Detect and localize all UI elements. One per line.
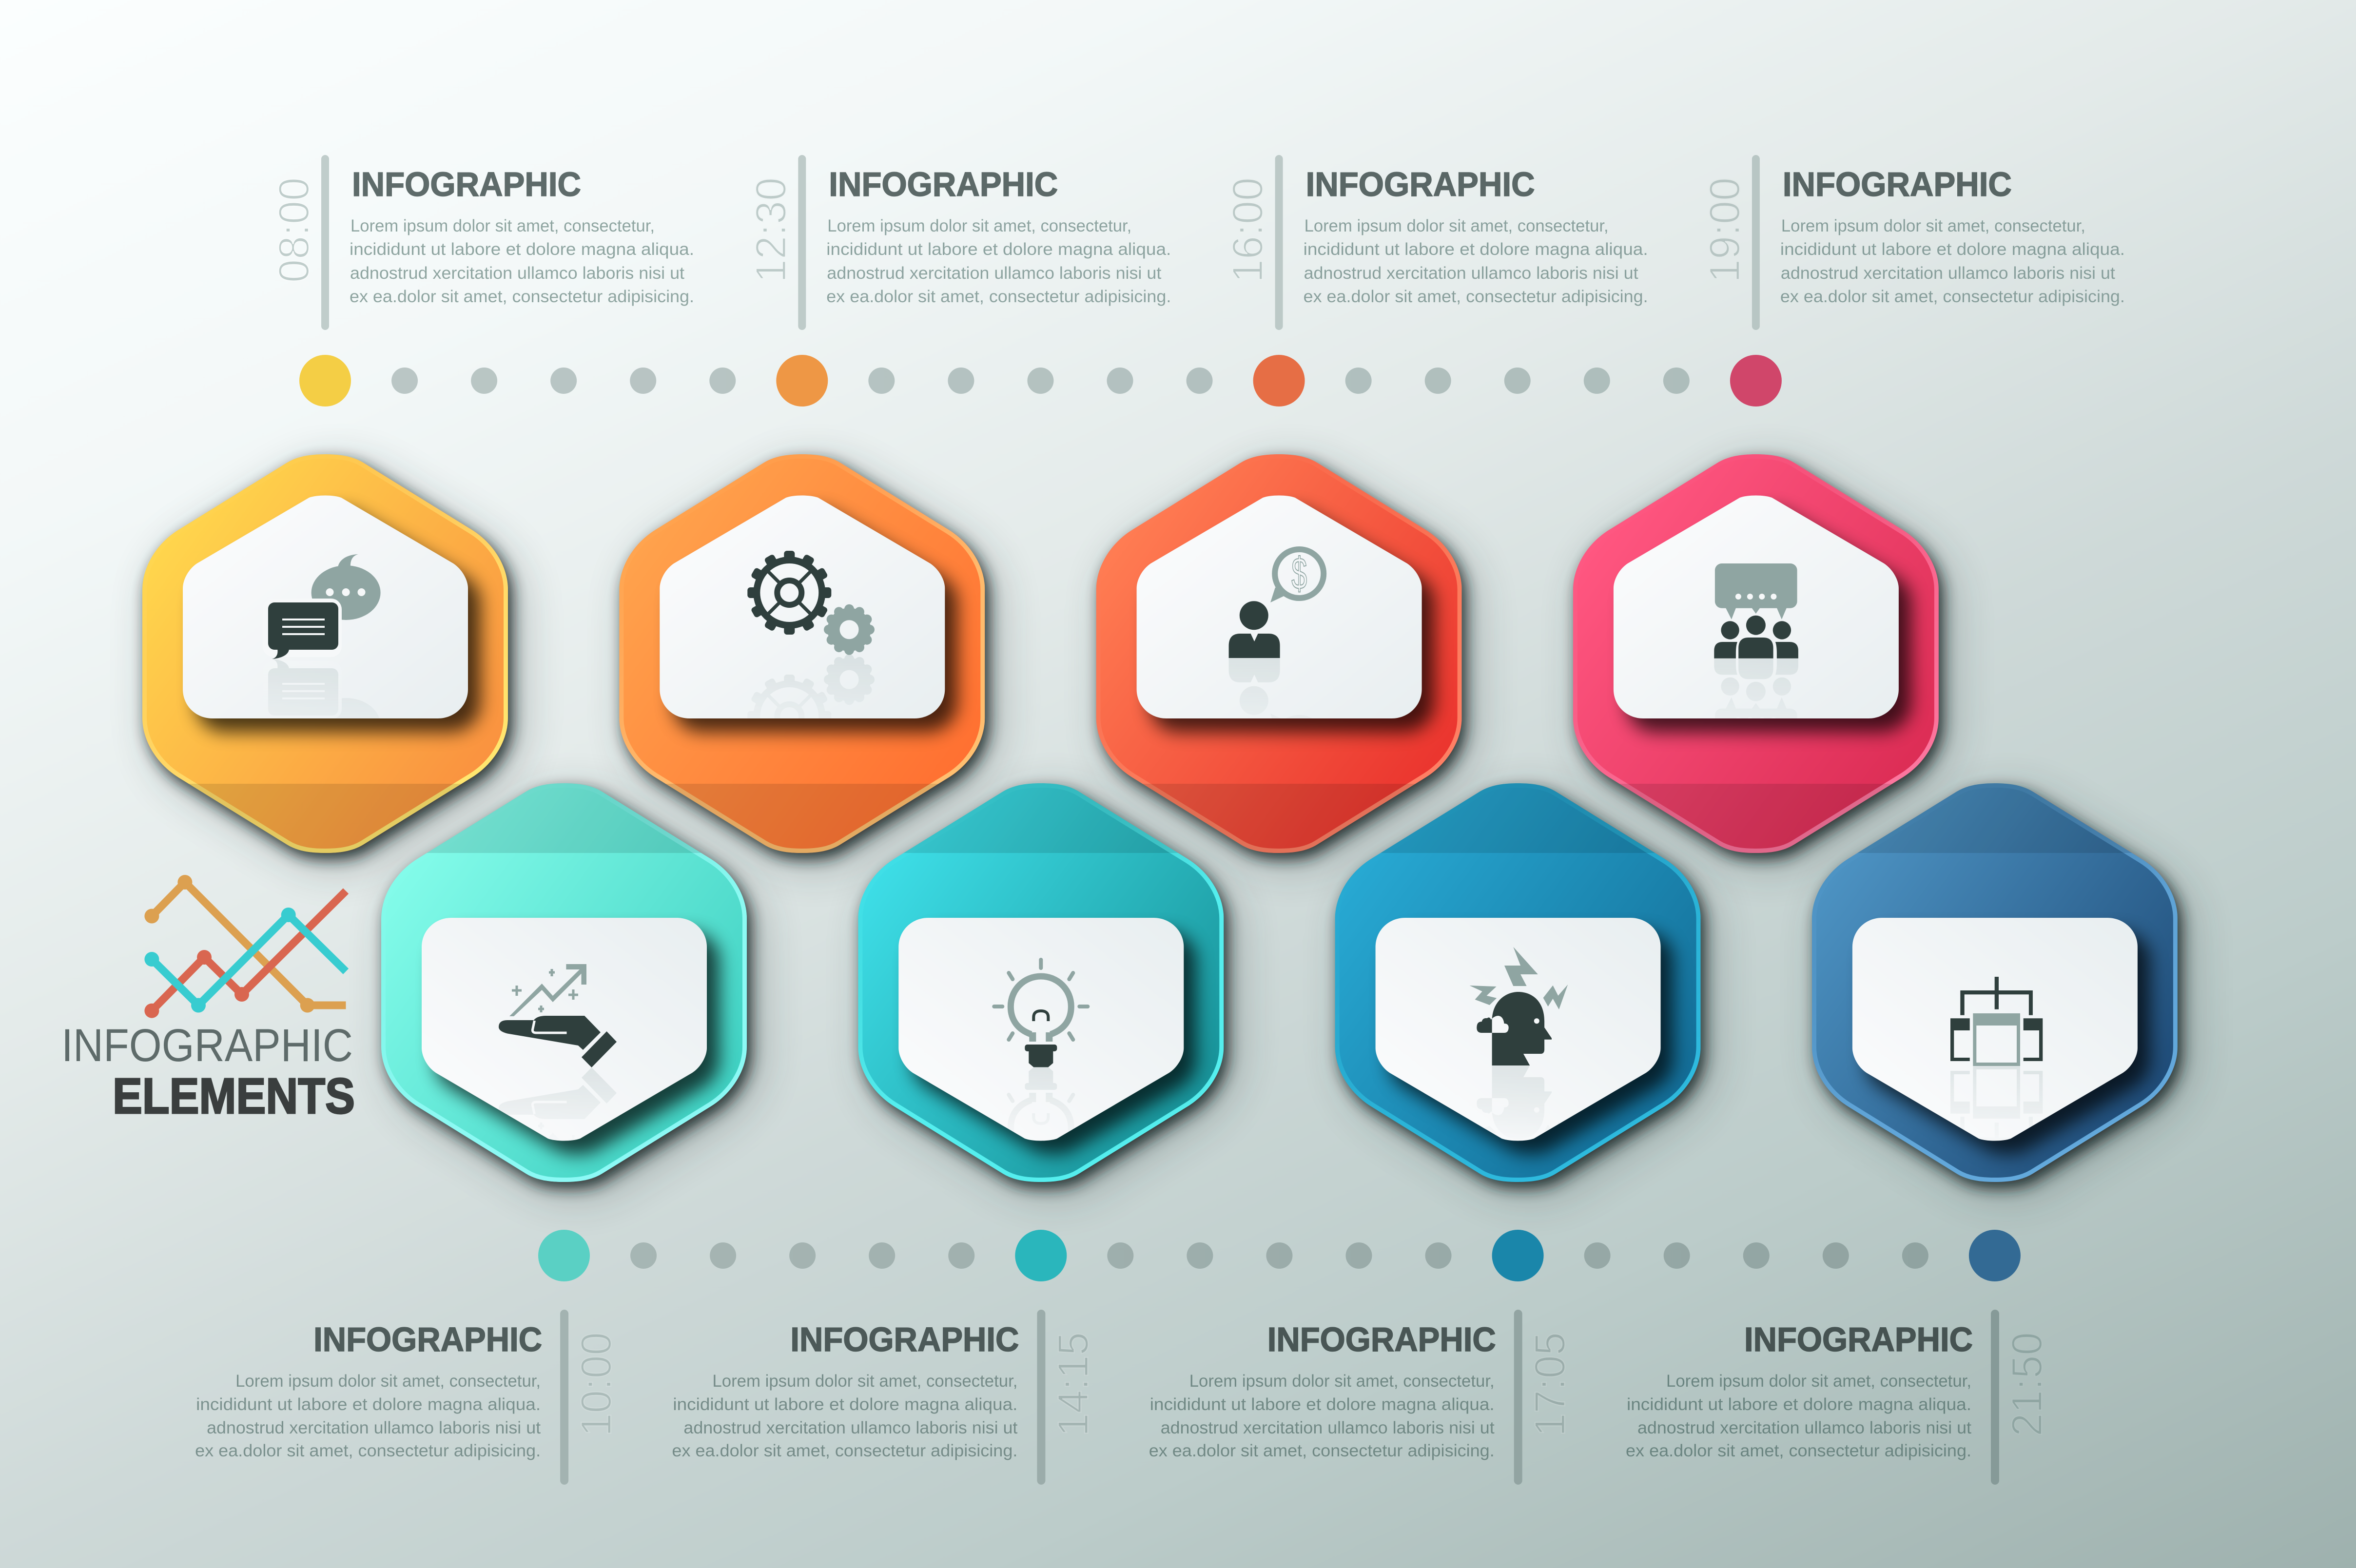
icon: flow diagram [1950, 977, 2043, 1066]
divider bar [1037, 1310, 1045, 1485]
divider bar [1752, 155, 1760, 330]
hexagon shadow [147, 461, 520, 865]
hexagon 8: navy [1800, 775, 2190, 1194]
body text: Lorem ipsum dolor sit amet, consectetur, [827, 216, 1131, 235]
hexagon 6: teal [846, 775, 1236, 1194]
top text block 3 [1224, 155, 1648, 330]
top text block 4 [1700, 155, 2125, 330]
icon: head with lightning [1470, 947, 1568, 1065]
body text: ex ea.dolor sit amet, consectetur adipisicing. [1149, 1441, 1495, 1460]
white panel [183, 495, 468, 718]
body text: Lorem ipsum dolor sit amet, consectetur, [1666, 1372, 1971, 1391]
hexagon body [130, 454, 520, 862]
hexagon 1: yellow [130, 454, 520, 865]
body text: incididunt ut labore et dolore magna aliqua. [673, 1395, 1017, 1414]
icon reflection [1950, 1066, 2043, 1155]
body text: ex ea.dolor sit amet, consectetur adipisicing. [672, 1441, 1017, 1460]
hexagon shadow [386, 790, 759, 1194]
logo word: INFOGRAPHIC: INFOGRAPHIC [61, 1020, 353, 1071]
body text [1780, 216, 2125, 306]
bottom text block 2 [672, 1310, 1097, 1485]
white panel [1137, 495, 1422, 718]
hexagon shadow [1101, 461, 1474, 865]
body text: adnostrud xercitation ullamco laboris nisi ut [1161, 1418, 1495, 1437]
body text: incididunt ut labore et dolore magna aliqua. [1304, 240, 1648, 259]
white panel [898, 918, 1184, 1141]
body text: ex ea.dolor sit amet, consectetur adipisicing. [1304, 287, 1648, 306]
hexagon 5: mint [369, 775, 759, 1194]
time label: 17:05 [1526, 1332, 1574, 1436]
time label: 12:30 [746, 177, 795, 283]
time label: 16:00 [1224, 177, 1272, 283]
time label: 21:50 [2003, 1332, 2051, 1436]
logo word: ELEMENTS: ELEMENTS [113, 1068, 355, 1124]
body text: adnostrud xercitation ullamco laboris nisi ut [1781, 264, 2115, 283]
body text: Lorem ipsum dolor sit amet, consectetur, [1305, 216, 1609, 235]
heading: INFOGRAPHIC [1267, 1320, 1496, 1358]
body text: ex ea.dolor sit amet, consectetur adipisicing. [350, 287, 694, 306]
body text: Lorem ipsum dolor sit amet, consectetur, [350, 216, 655, 235]
icon: chat bubbles [263, 554, 381, 659]
hexagon shadow [1577, 461, 1950, 865]
body text: incididunt ut labore et dolore magna aliqua. [1627, 1395, 1971, 1414]
time label: 08:00 [270, 177, 318, 283]
body text: incididunt ut labore et dolore magna aliqua. [1150, 1395, 1495, 1414]
icon reflection [994, 1067, 1088, 1175]
body text [350, 216, 694, 306]
hexagon body [1323, 775, 1713, 1182]
body text [1626, 1372, 1971, 1460]
hexagon shadow [623, 461, 996, 865]
heading: INFOGRAPHIC [790, 1320, 1019, 1358]
body text [826, 216, 1171, 306]
icon: person with dollar bubble [1229, 549, 1324, 658]
divider bar [1991, 1310, 1999, 1485]
bottom text block 1 [195, 1310, 620, 1485]
heading: INFOGRAPHIC [1744, 1320, 1973, 1358]
body text: ex ea.dolor sit amet, consectetur adipisicing. [195, 1441, 541, 1460]
body text: ex ea.dolor sit amet, consectetur adipisicing. [1626, 1441, 1971, 1460]
time label: 14:15 [1049, 1332, 1097, 1436]
white panel [1614, 495, 1899, 718]
hexagon 2: orange [607, 454, 997, 865]
divider bar [1514, 1310, 1522, 1485]
time label: 19:00 [1700, 177, 1749, 283]
icon reflection [499, 1067, 617, 1171]
body text: Lorem ipsum dolor sit amet, consectetur, [1781, 216, 2085, 235]
body text: Lorem ipsum dolor sit amet, consectetur, [712, 1372, 1017, 1391]
top text block 1 [270, 155, 694, 330]
body text: ex ea.dolor sit amet, consectetur adipisicing. [1780, 287, 2125, 306]
body text: Lorem ipsum dolor sit amet, consectetur, [235, 1372, 541, 1391]
hexagon 7: blue [1323, 775, 1713, 1194]
icon: light bulb [994, 960, 1088, 1067]
heading: INFOGRAPHIC [352, 165, 581, 203]
logo: infographic elements [61, 875, 355, 1124]
hexagon shadow [862, 790, 1235, 1194]
body text [1304, 216, 1648, 306]
time label: 10:00 [572, 1332, 620, 1436]
top text block 2 [746, 155, 1171, 330]
body text [672, 1372, 1018, 1460]
bottom timeline dots [538, 1230, 2021, 1281]
divider bar [1275, 155, 1283, 330]
icon: group with speech bubble [1714, 563, 1798, 658]
hexagon body [1800, 775, 2190, 1182]
logo line chart [144, 875, 346, 1018]
icon reflection [747, 654, 875, 758]
heading: INFOGRAPHIC [1306, 165, 1535, 203]
white panel [660, 495, 945, 718]
hexagon shadow [1340, 790, 1713, 1194]
divider bar [321, 155, 329, 330]
hexagon body [1561, 454, 1951, 862]
white panel [1376, 918, 1661, 1141]
body text: adnostrud xercitation ullamco laboris nisi ut [1304, 264, 1638, 283]
icon: hand with rising chart [499, 964, 617, 1067]
hexagon 3: red [1084, 454, 1474, 865]
icon: gears [747, 551, 875, 655]
icon reflection [1714, 658, 1798, 753]
body text: incididunt ut labore et dolore magna aliqua. [1780, 240, 2125, 259]
body text: incididunt ut labore et dolore magna aliqua. [196, 1395, 541, 1414]
body text: adnostrud xercitation ullamco laboris nisi ut [350, 264, 684, 283]
body text: ex ea.dolor sit amet, consectetur adipisicing. [826, 287, 1171, 306]
body text [195, 1372, 541, 1460]
icon reflection [1229, 658, 1324, 767]
top timeline dots [299, 355, 1782, 407]
body text: incididunt ut labore et dolore magna aliqua. [350, 240, 694, 259]
body text: adnostrud xercitation ullamco laboris nisi ut [1637, 1418, 1971, 1437]
heading: INFOGRAPHIC [313, 1320, 542, 1358]
hexagon body [1084, 454, 1474, 862]
divider bar [798, 155, 806, 330]
body text [1149, 1372, 1495, 1460]
bottom text block 4 [1626, 1310, 2051, 1485]
heading: INFOGRAPHIC [1783, 165, 2012, 203]
hexagon body [607, 454, 997, 862]
hexagon body [846, 775, 1236, 1182]
bottom text block 3 [1149, 1310, 1574, 1485]
body text: Lorem ipsum dolor sit amet, consectetur, [1189, 1372, 1495, 1391]
divider bar [560, 1310, 568, 1485]
white panel [1852, 918, 2138, 1141]
heading: INFOGRAPHIC [829, 165, 1058, 203]
hexagon 4: pink [1561, 454, 1951, 865]
body text: adnostrud xercitation ullamco laboris nisi ut [683, 1418, 1018, 1437]
body text: adnostrud xercitation ullamco laboris nisi ut [207, 1418, 541, 1437]
body text: incididunt ut labore et dolore magna aliqua. [826, 240, 1171, 259]
hexagon shadow [1816, 790, 2189, 1194]
white panel [422, 918, 707, 1141]
icon reflection [1470, 1065, 1568, 1184]
body text: adnostrud xercitation ullamco laboris nisi ut [827, 264, 1162, 283]
icon reflection [268, 659, 375, 712]
hexagon body [369, 775, 759, 1182]
